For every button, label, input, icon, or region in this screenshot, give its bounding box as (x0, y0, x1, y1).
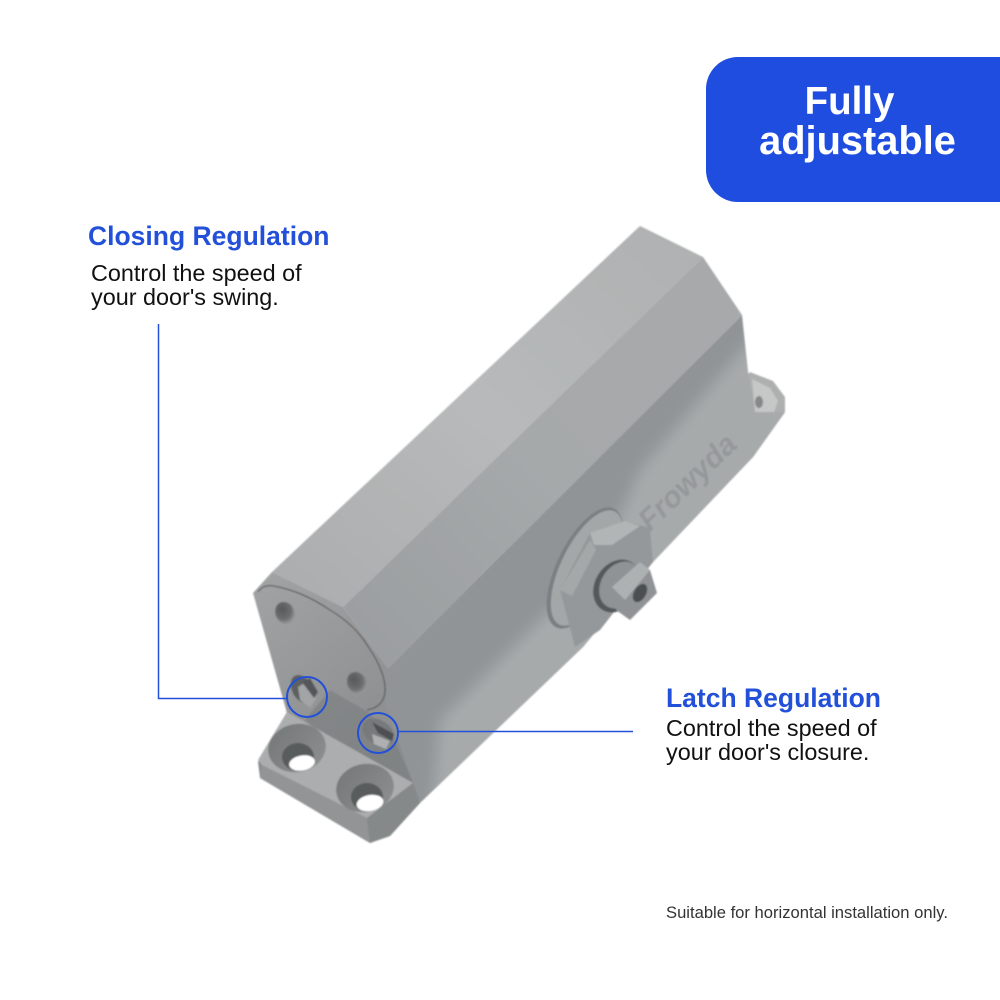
latch screw (357, 713, 399, 751)
end cap (253, 572, 413, 783)
marker circle (287, 677, 327, 717)
description: your door's swing. (91, 284, 279, 310)
heading: Latch Regulation (666, 683, 881, 713)
footnote: Suitable for horizontal installation only. (666, 903, 948, 922)
leader line (399, 730, 633, 732)
panel: Fully adjustable badge (706, 57, 1000, 202)
cap seam (258, 586, 385, 710)
collar (584, 551, 650, 621)
brand mark: Frowyda (632, 428, 744, 537)
right hole (343, 668, 371, 698)
heading: Closing Regulation (88, 221, 329, 251)
middle facet (343, 257, 742, 668)
leader line (158, 324, 287, 698)
mounting hole 2 (332, 758, 398, 818)
closer body side (385, 314, 784, 804)
marker circle (358, 713, 398, 753)
description: Control the speed of (666, 715, 877, 741)
badge heading: adjustable (759, 119, 956, 163)
description: your door's closure. (666, 739, 869, 765)
callout: Closing Regulation (88, 221, 329, 717)
closing screw (286, 671, 318, 708)
callout: Latch Regulation (358, 683, 881, 765)
shaded end face lower area (305, 690, 413, 783)
badge heading: Fully (805, 80, 895, 123)
description: Control the speed of (91, 260, 302, 286)
far mounting flange (720, 372, 785, 486)
top facet (272, 226, 703, 607)
mounting hole 1 (264, 718, 330, 778)
washer (531, 496, 639, 640)
upper hole (272, 599, 298, 627)
foot plate (258, 712, 420, 843)
product: door closer (253, 226, 790, 843)
adjustment nut (531, 496, 657, 647)
small nut (612, 562, 657, 620)
hex nut (560, 521, 653, 647)
